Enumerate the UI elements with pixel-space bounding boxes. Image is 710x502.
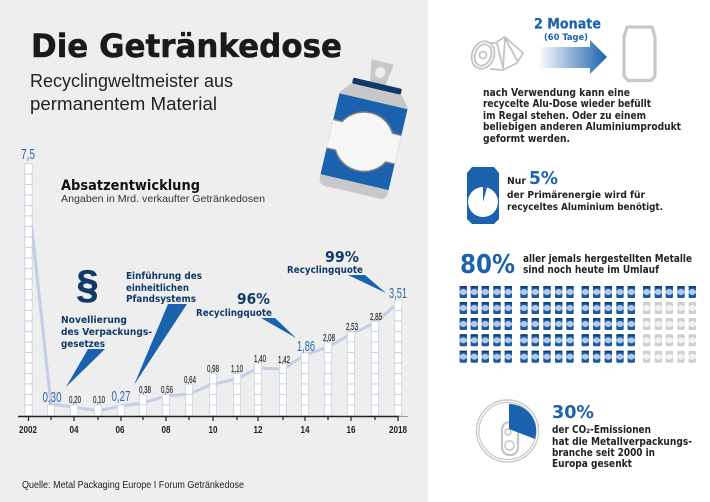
text block: recycelte Alu-Dose wieder befüllt [483,98,651,110]
title: Die Getränkedose [31,27,342,65]
text block: sind noch heute im Umlauf [523,264,659,276]
subtitle: permanentem Material [30,94,217,114]
callout: Novellierung des Verpackungsgesetzes: des Verpackungs- [61,327,152,338]
text block: recyceltes Aluminium benötigt. [507,202,663,213]
value labels: 0,10 [93,395,105,406]
callout: 96% Recyclingquote: Recyclingquote [196,308,272,319]
text block: branche seit 2000 in [552,447,655,459]
panel: 30 percent CO2 [476,400,692,470]
text: Nur: Nur [507,176,526,187]
callout: Novellierung des Verpackungsgesetzes [61,315,152,387]
text block: beliebigen anderen Aluminiumprodukt [483,121,681,133]
figure: 5%: 5% [529,168,558,189]
callout: Novellierung des Verpackungsgesetzes: Novellierung [61,315,127,326]
column 2002 [25,164,32,415]
text block: Europa gesenkt [552,458,632,470]
panel: two months recycling [468,16,681,145]
value labels: 3,51 [389,285,407,302]
value labels: 2,08 [323,333,335,344]
bar chart: stacked cans by year [18,164,408,421]
x axis labels: 16 [346,425,356,436]
panel: left background [0,0,428,502]
callout: 99% Recyclingquote: Recyclingquote [287,265,363,276]
trend line [28,198,398,411]
value labels: 0,56 [161,385,173,396]
value labels: 1,40 [254,354,266,365]
x axis labels: 2018 [389,425,407,436]
callout: Einführung des einheitlichen Pfandsystems: Einführung des [126,271,202,282]
text block: geformt werden. [483,133,570,145]
x axis labels: 12 [254,425,263,436]
icon: tilted beverage can [320,60,408,199]
text block [483,87,681,145]
value labels: 1,10 [231,364,243,375]
callout: Novellierung des Verpackungsgesetzes: gesetzes [61,339,105,350]
value labels: 1,86 [297,338,315,355]
text block: der Primärenergie wird für [507,190,645,201]
x axis labels: 04 [70,425,79,436]
text block: nach Verwendung kann eine [483,87,630,99]
x axis labels: 2002 [19,425,37,436]
figure: 30%: 30% [552,402,594,423]
value labels: 7,5 [21,146,35,163]
value labels: 0,64 [184,375,196,386]
icon: blue can with pie [467,167,499,224]
value labels: 0,38 [139,385,151,396]
callout: Einführung des einheitlichen Pfandsystems: einheitlichen [126,283,189,294]
subtitle [30,71,233,114]
heading: Absatzentwicklung: Absatzentwicklung [61,178,200,194]
icon: crushed can [468,37,523,72]
chart subtitle: Angaben in Mrd. verkaufter Getränkedosen [61,193,265,205]
value labels: 2,85 [370,312,382,323]
value labels: 2,53 [346,322,358,333]
icon: can outline [624,27,655,80]
x axis labels: 10 [208,425,218,436]
x axis labels: 14 [300,425,310,436]
text block: hat die Metallverpackungs- [552,436,692,448]
columns 2003 to 2018 [47,300,402,415]
text block [523,253,692,276]
icon: paragraph sign: § [76,263,99,307]
value labels [21,146,407,406]
value labels: 0,27 [112,388,130,405]
heading: 2 Monate: 2 Monate [534,16,601,32]
x axis labels [19,425,407,436]
callout: 99% Recyclingquote: 99% [325,248,359,266]
subheading: 60 Tage: (60 Tage) [544,33,588,43]
callout: 96% Recyclingquote: 96% [237,290,270,308]
subtitle: Recyclingweltmeister aus [30,71,233,91]
panel: 80 percent metals [460,250,696,363]
x axis labels: 06 [116,425,125,436]
panel: 5 percent energy [467,167,663,224]
text block [507,190,663,213]
text block: im Regal stehen. Oder zu einem [483,110,646,122]
arrow [538,40,607,74]
callout: Einführung des einheitlichen Pfandsystems: Pfandsystems [126,294,196,305]
value labels: 1,42 [278,355,290,366]
x axis labels: 08 [162,425,171,436]
text block [552,424,692,470]
value labels: 0,20 [69,395,81,406]
icon: can top pie [476,400,538,462]
text block: der CO₂-Emissionen [552,424,651,436]
source note: Quelle: Metal Packaging Europe I Forum Getränkedose [22,479,244,491]
callout: 99% Recyclingquote [287,248,386,293]
figure: 80%: 80% [460,250,515,280]
pictogram grid of cans [460,286,696,363]
callout: 96% Recyclingquote [196,290,296,338]
value labels: 0,30 [42,389,62,406]
value labels: 0,98 [207,364,219,375]
callout: Einführung des einheitlichen Pfandsystems [126,271,202,385]
